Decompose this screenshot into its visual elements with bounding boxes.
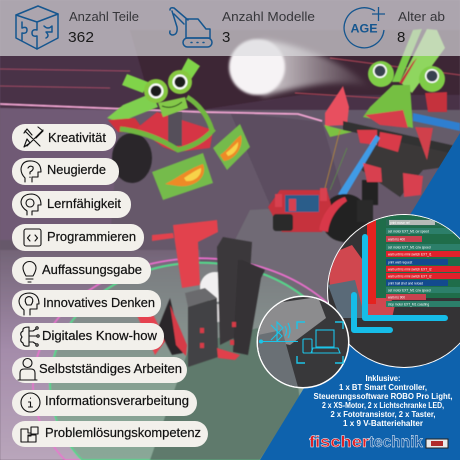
pill: Kreativität [12,124,116,151]
pill: Auffassungsgabe: Auffassungsgabe [42,263,142,277]
code blocks: wait ms 900 [388,296,405,300]
pill: Neugierde: Neugierde [47,163,106,177]
stat: Anzahl Modelle: 3 [222,29,230,46]
code blocks: set motor EXT_M1 ccw speed [388,288,431,292]
pill: Problemlösungskompetenz: Problemlösungskompetenz [45,426,201,440]
inclusions text: 1 x BT Smart Controller, [339,382,427,392]
icon: age badge [344,7,385,48]
circuit board car [268,188,373,242]
stat: Anzahl Modelle: Anzahl Modelle [222,10,315,24]
icon: puzzle cube [16,6,58,49]
magnified circle: bluetooth [256,296,350,388]
logo: fischertechnik: fischer [309,434,369,451]
code blocks: wait until is mini switch EXT_I2 [388,268,432,272]
stacked tower [130,220,265,367]
code blocks: set motor EXT_M1 ccw speed [388,246,431,250]
code blocks: print move ref [390,221,410,225]
arena disc [33,258,367,460]
inclusions text: Inklusive: [366,373,401,383]
pill: Auffassungsgabe [12,257,151,284]
pill: Informationsverarbeitung [12,390,197,416]
stat: Anzahl Modelle [222,10,315,46]
stat: Alter ab [397,10,445,46]
pill: Digitales Know-how: Digitales Know-how [42,329,158,343]
pill: Programmieren: Programmieren [47,230,136,244]
code blocks: print ball shot and reload [388,282,423,286]
header band [0,0,460,56]
inclusions text: 2 x Fototransistor, 2 x Taster, [330,409,436,419]
code blocks: wait until is mini switch EXT_I2 [388,274,432,278]
pill: Innovatives Denken: Innovatives Denken [43,296,155,310]
pill: Programmieren [12,224,144,251]
logo: fischertechnik: technik [369,434,423,451]
pill: Problemlösungskompetenz [12,421,208,447]
comet ball [229,39,372,96]
code blocks: print wait request [388,260,412,264]
flame plates [152,124,250,200]
code blocks: set motor EXT_M1 cw speed [388,230,429,234]
inclusions text [314,373,452,428]
robot left [107,58,250,200]
inclusions text: 1 x 9 V-Batteriehalter [343,418,424,428]
robot right [268,29,460,242]
stat: Anzahl Teile [68,10,139,46]
ears and face [122,58,200,117]
pill: Lernfähigkeit: Lernfähigkeit [47,197,122,211]
pill: Selbstständiges Arbeiten [12,357,187,383]
stat: Alter ab: 8 [397,29,405,46]
icon: age badge: AGE [350,24,378,36]
stat: Anzahl Teile: 362 [68,29,94,46]
pill: Innovatives Denken [12,290,161,317]
stat: Anzahl Teile: Anzahl Teile [69,10,139,24]
blue panel [260,133,460,460]
pill list: skills [12,124,208,447]
logo: fischertechnik [309,434,448,451]
pill: Lernfähigkeit [12,191,131,218]
pill: Digitales Know-how [12,323,164,350]
pill: Neugierde [12,158,119,185]
pill: Informationsverarbeitung: Informationsverarbeitung [45,394,189,408]
code blocks [386,219,460,307]
code blocks: stop motor EXT_M1 coasting [388,302,429,306]
code blocks: wait until is mini switch EXT_I1 [388,252,432,256]
code blocks: wait ms 400 [388,238,405,242]
cyan brackets [354,237,445,330]
pill: Selbstständiges Arbeiten: Selbstständiges Arbeiten [39,362,182,376]
icon: bluetooth and devices [260,322,343,363]
pill: Kreativität: Kreativität [48,131,107,145]
magnified circle: software [327,214,460,368]
icon: crane [170,8,212,47]
stat: Alter ab: Alter ab [398,10,445,24]
